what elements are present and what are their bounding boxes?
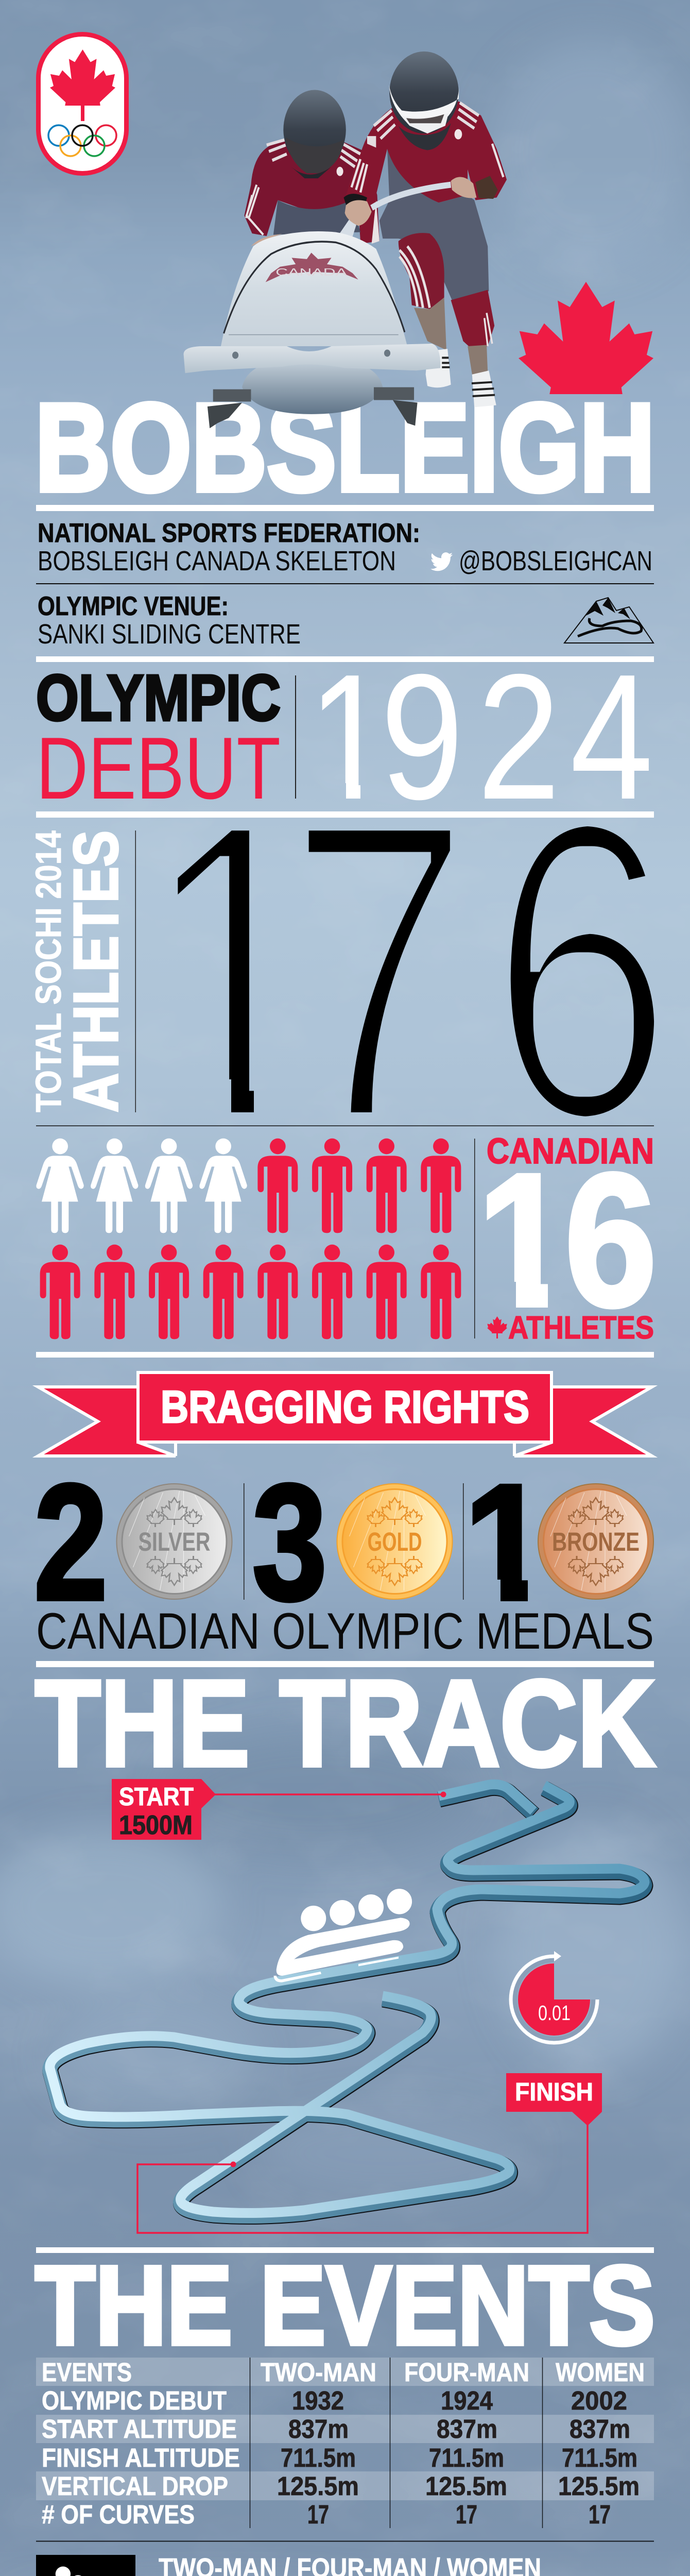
- table values: 17: [456, 2500, 477, 2529]
- table values: 711.5m: [562, 2443, 637, 2472]
- medal count row: [34, 1450, 654, 1634]
- venue text block: [38, 591, 301, 650]
- medal: silver: [116, 1483, 233, 1600]
- timer: 0.01 on track: 0.01: [538, 2001, 571, 2025]
- table values: 125.5m: [558, 2471, 640, 2501]
- total athletes block: ATHLETES: [61, 831, 131, 1112]
- medal: silver: SILVER: [138, 1527, 210, 1556]
- icon: twitter bird: [430, 552, 453, 571]
- start/finish connector lines: [137, 1794, 588, 2233]
- table values: 125.5m: [425, 2471, 507, 2501]
- back athlete: [244, 90, 380, 241]
- table row labels: VERTICAL DROP: [42, 2471, 228, 2501]
- gold count: 3: [252, 1450, 327, 1634]
- table row labels: OLYMPIC DEBUT: [42, 2386, 227, 2415]
- federation text block: [38, 518, 420, 577]
- icon: mountain venue: [564, 598, 653, 643]
- table values: 1924: [441, 2386, 493, 2415]
- banner: bragging rights: [38, 1372, 652, 1456]
- table values: 837m: [437, 2414, 497, 2444]
- bobsled: CANADA: [275, 266, 348, 278]
- total athletes block: 176: [142, 733, 673, 1208]
- table values: 837m: [570, 2414, 630, 2444]
- medal: bronze: BRONZE: [552, 1527, 640, 1556]
- table row labels: # OF CURVES: [42, 2500, 195, 2529]
- timer: 0.01 on track: [511, 1951, 597, 2043]
- front athlete: [337, 52, 507, 407]
- table values: 2002: [571, 2386, 627, 2415]
- medal: bronze: [538, 1483, 654, 1600]
- rule: [36, 505, 654, 511]
- table values: 17: [307, 2500, 329, 2529]
- bobsled: [183, 231, 440, 428]
- canadian 16 athletes: 16: [477, 1134, 657, 1346]
- table row labels: FINISH ALTITUDE: [42, 2443, 240, 2472]
- icon: black sled tile: [36, 2555, 135, 2576]
- medal: gold: [337, 1483, 453, 1600]
- start marker: [112, 1779, 216, 1840]
- events table: [36, 2358, 654, 2529]
- medal: gold: GOLD: [368, 1527, 422, 1556]
- olympic debut block: [37, 673, 649, 801]
- table row labels: FOUR-MAN: [404, 2358, 529, 2387]
- table values: 837m: [288, 2414, 349, 2444]
- table values: 711.5m: [281, 2443, 356, 2472]
- pictogram: canadian athletes: [36, 1139, 461, 1339]
- start marker: 1500M: [119, 1810, 193, 1840]
- table row labels: EVENTS: [42, 2358, 132, 2387]
- table values: 711.5m: [429, 2443, 504, 2472]
- olympic committee logo: [38, 34, 127, 173]
- finish marker: [506, 2073, 602, 2126]
- venue text block: OLYMPIC VENUE:: [38, 591, 229, 621]
- icon: sled on track: [273, 1889, 412, 1982]
- olympic debut block: DEBUT: [36, 719, 281, 818]
- table values: [277, 2386, 640, 2529]
- table row labels: [42, 2358, 645, 2529]
- canadian 16 athletes: ATHLETES: [508, 1310, 654, 1346]
- table values: 17: [589, 2500, 611, 2529]
- women row: [36, 1139, 247, 1233]
- federation text block: BOBSLEIGH CANADA SKELETON: [38, 546, 396, 577]
- start marker: START: [119, 1783, 194, 1811]
- venue text block: SANKI SLIDING CENTRE: [38, 619, 301, 650]
- track map: [50, 1784, 645, 2216]
- men rows: [40, 1139, 461, 1339]
- banner: bragging rights: BRAGGING RIGHTS: [161, 1381, 529, 1432]
- olympic debut block: OLYMPIC: [36, 662, 281, 734]
- maple leaf large: [519, 282, 653, 394]
- silver count: 2: [34, 1450, 108, 1634]
- table row labels: TWO-MAN: [261, 2358, 376, 2387]
- photo: athletes pushing bobsled: [183, 52, 507, 428]
- finish marker: FINISH: [515, 2078, 593, 2106]
- olympic debut block: 1924: [308, 637, 653, 837]
- federation text block: NATIONAL SPORTS FEDERATION:: [38, 518, 420, 548]
- table values: 1932: [292, 2386, 344, 2415]
- total athletes block: TOTAL SOCHI 2014: [28, 831, 68, 1112]
- bronze count: 1: [464, 1450, 548, 1634]
- total athletes block: [35, 826, 654, 1116]
- table values: 125.5m: [277, 2471, 359, 2501]
- table row labels: START ALTITUDE: [42, 2414, 237, 2444]
- table row labels: WOMEN: [556, 2358, 645, 2387]
- canadian 16 athletes: CANADIAN: [487, 1131, 654, 1171]
